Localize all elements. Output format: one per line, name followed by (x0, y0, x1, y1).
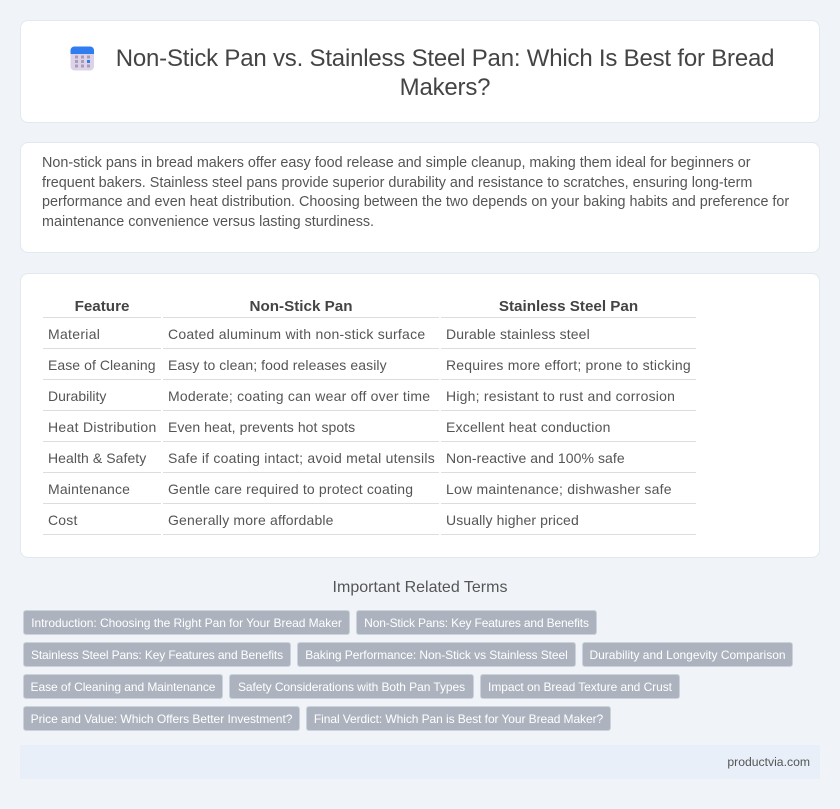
comparison table: Requires more effort; prone to sticking (446, 357, 691, 373)
comparison table: Non-reactive and 100% safe (446, 450, 625, 466)
comparison table: Excellent heat conduction (446, 419, 611, 435)
related terms tags: Final Verdict: Which Pan is Best for Your Bread Maker? (314, 712, 603, 726)
comparison table: Durable stainless steel (446, 326, 590, 342)
comparison table: Maintenance (48, 481, 130, 497)
comparison table: Stainless Steel Pan (499, 298, 638, 315)
comparison table: Usually higher priced (446, 512, 579, 528)
related terms tags: Non-Stick Pans: Key Features and Benefits (364, 616, 589, 630)
panel: title card (20, 20, 820, 123)
comparison table: Durability (48, 388, 106, 404)
comparison table: Heat Distribution (48, 419, 157, 435)
title: Non-Stick Pan vs. Stainless Steel Pan: Which Is Best for Bread (116, 45, 774, 72)
summary text: maintenance convenience versus lasting sturdiness. (42, 214, 374, 230)
related terms tags: Stainless Steel Pans: Key Features and Benefits (31, 648, 283, 662)
comparison table: Ease of Cleaning (48, 357, 156, 373)
comparison table: Even heat, prevents hot spots (168, 419, 355, 435)
comparison table: Health & Safety (48, 450, 146, 466)
footer source: productvia.com (727, 755, 810, 769)
icon: calendar (70, 46, 94, 70)
related terms tags: Introduction: Choosing the Right Pan for Your Bread Maker (31, 616, 342, 630)
summary text: frequent bakers. Stainless steel pans provide superior durability and resistance to scratches, ensuring long-term (42, 174, 752, 190)
comparison table: Moderate; coating can wear off over time (168, 388, 430, 404)
related terms tags: Baking Performance: Non-Stick vs Stainless Steel (305, 648, 568, 662)
summary text: performance and even heat distribution. Choosing between the two depends on your baking habits and preference for (42, 194, 789, 210)
footer bar (20, 745, 820, 779)
comparison table: High; resistant to rust and corrosion (446, 388, 675, 404)
comparison table: Generally more affordable (168, 512, 334, 528)
panel: summary card (20, 142, 820, 253)
related terms tags: Durability and Longevity Comparison (589, 648, 786, 662)
summary text: Non-stick pans in bread makers offer easy food release and simple cleanup, making them ideal for beginners or (42, 155, 751, 171)
title (116, 45, 774, 101)
comparison table: Safe if coating intact; avoid metal utensils (168, 450, 435, 466)
comparison table: Material (48, 326, 100, 342)
comparison table: Easy to clean; food releases easily (168, 357, 387, 373)
comparison table (43, 298, 696, 535)
related terms tags: Ease of Cleaning and Maintenance (31, 680, 215, 694)
comparison table: Gentle care required to protect coating (168, 481, 413, 497)
related terms tags (23, 610, 793, 731)
comparison table: Cost (48, 512, 78, 528)
comparison table: Non-Stick Pan (250, 298, 352, 315)
comparison table: Feature (75, 298, 129, 315)
title: Makers? (400, 74, 490, 101)
related terms tags: Safety Considerations with Both Pan Types (238, 680, 465, 694)
related terms heading: Important Related Terms (333, 579, 507, 596)
comparison table: Coated aluminum with non-stick surface (168, 326, 425, 342)
related terms tags: Impact on Bread Texture and Crust (488, 680, 672, 694)
panel: comparison table card (20, 273, 820, 558)
summary text (42, 155, 789, 230)
related terms tags: Price and Value: Which Offers Better Investment? (31, 712, 292, 726)
comparison table: Low maintenance; dishwasher safe (446, 481, 672, 497)
